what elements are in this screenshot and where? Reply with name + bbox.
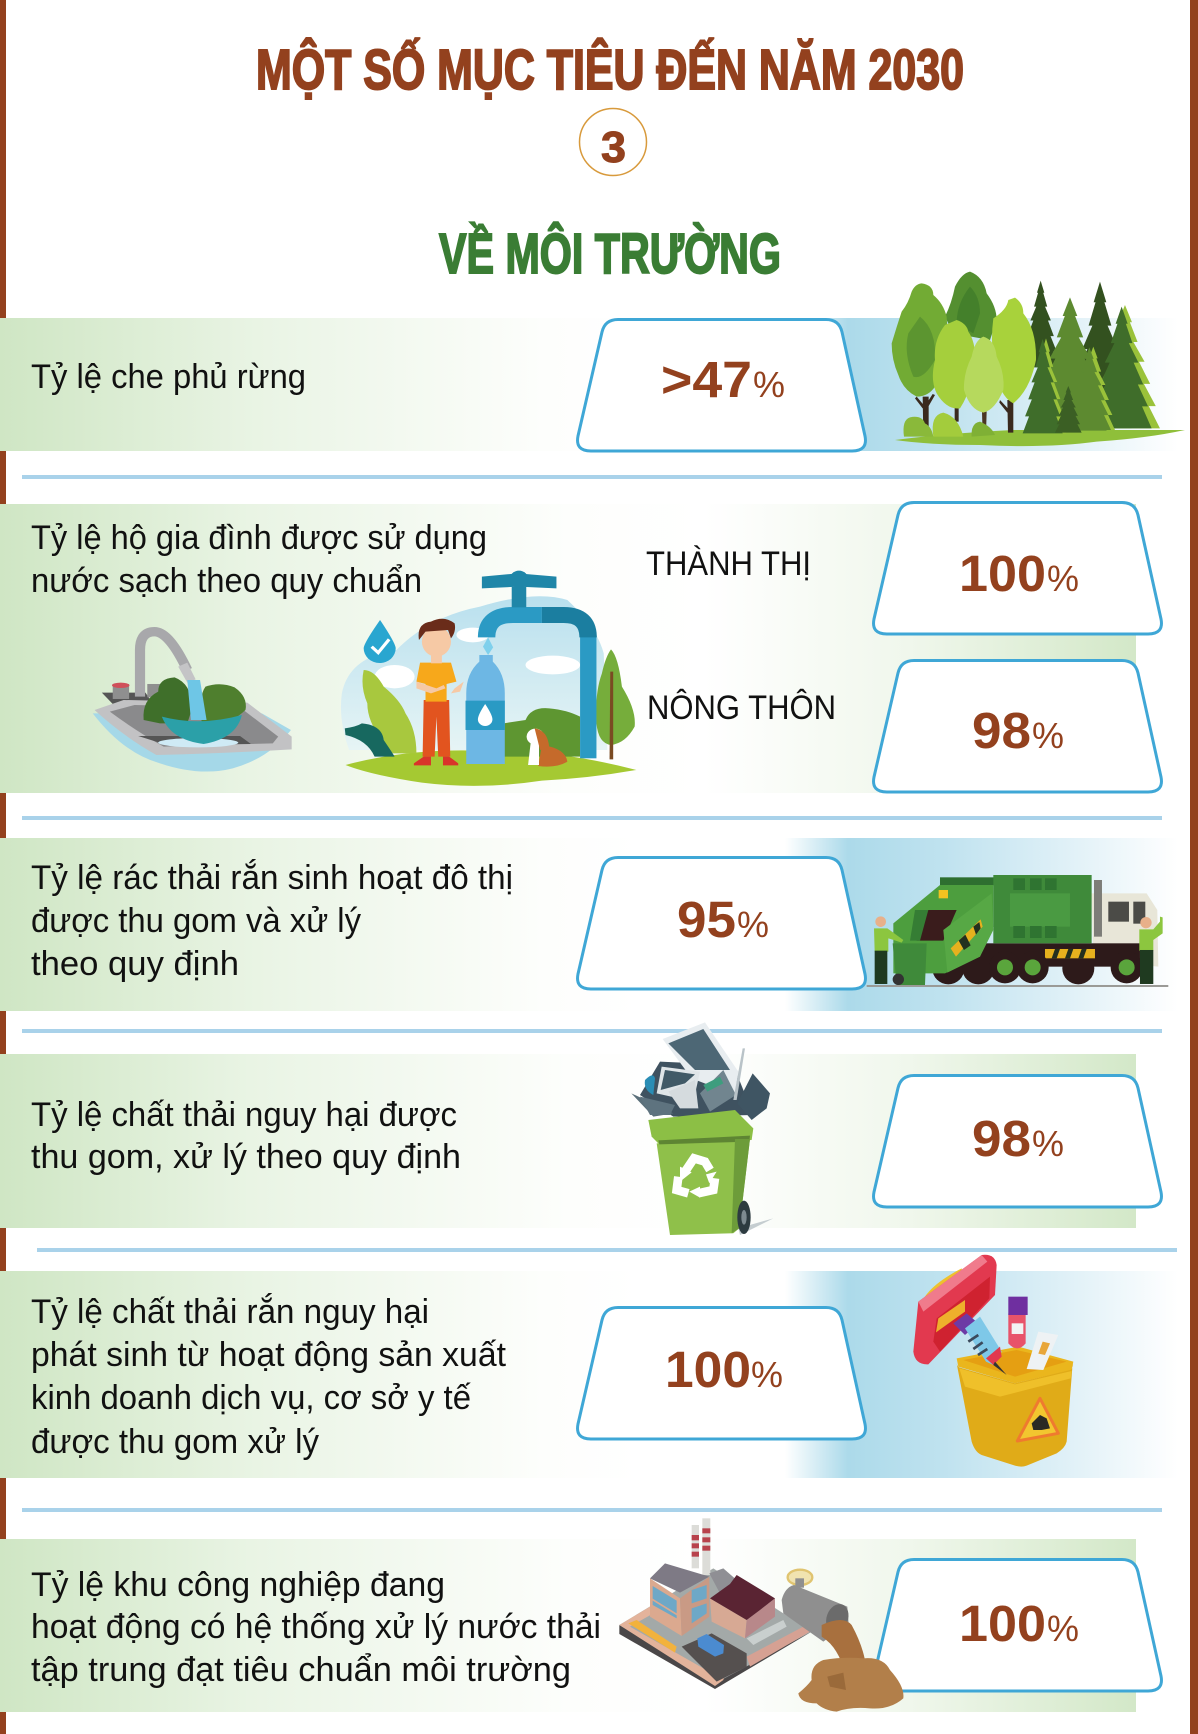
panel: clean water xyxy=(0,502,1161,793)
text: industrial and medical hazardous waste: kinh doanh dịch vụ, cơ sở y tế xyxy=(31,1379,471,1417)
panel: industrial and medical hazardous waste xyxy=(0,1255,1178,1478)
value box: 100 percent: % xyxy=(1047,1608,1079,1649)
value box: rural 98 percent: 98 xyxy=(972,702,1031,759)
value box: urban 100 percent: 100 xyxy=(959,545,1046,602)
icon: garbage truck xyxy=(867,875,1168,987)
value box: 95 percent: 95 xyxy=(677,891,736,948)
text: clean water: Tỷ lệ hộ gia đình được sử dụng xyxy=(31,519,487,557)
text: clean water xyxy=(31,519,487,600)
value box: rural 98 percent: % xyxy=(1032,715,1064,756)
text: clean water: nước sạch theo quy chuẩn xyxy=(31,562,422,600)
value box: 95 percent xyxy=(578,858,865,989)
icon: forest xyxy=(892,272,1185,446)
value box: 98 percent xyxy=(874,1076,1161,1207)
text: industrial wastewater: hoạt động có hệ thống xử lý nước thải xyxy=(31,1608,601,1646)
icon: kitchen sink xyxy=(93,632,292,772)
text: industrial wastewater: tập trung đạt tiêu chuẩn môi trường xyxy=(31,1651,571,1689)
number badge xyxy=(580,108,646,176)
value box: over 47 percent: % xyxy=(753,364,785,405)
value box: over 47 percent: >47 xyxy=(661,351,752,408)
text: forest cover: Tỷ lệ che phủ rừng xyxy=(31,358,306,396)
panel: hazardous waste xyxy=(0,1022,1161,1235)
value box: over 47 percent xyxy=(578,320,865,451)
icon: boy with water tap xyxy=(341,571,636,786)
panel: forest cover xyxy=(0,272,1185,451)
value box: 100 percent: 100 xyxy=(959,1595,1046,1652)
text: industrial and medical hazardous waste: Tỷ lệ chất thải rắn nguy hại xyxy=(31,1293,429,1331)
label: urban: THÀNH THỊ xyxy=(646,545,811,583)
value box: 100 percent: 100 xyxy=(665,1341,751,1398)
text: industrial and medical hazardous waste: được thu gom xử lý xyxy=(31,1423,319,1461)
text: industrial and medical hazardous waste: phát sinh từ hoạt động sản xuất xyxy=(31,1336,507,1374)
text: industrial wastewater xyxy=(31,1566,601,1689)
panel: municipal solid waste xyxy=(0,838,1178,1011)
value box: 95 percent: % xyxy=(737,904,769,945)
value box: urban 100 percent: % xyxy=(1047,558,1079,599)
value box: urban 100 percent xyxy=(874,502,1161,634)
text: hazardous waste: thu gom, xử lý theo quy định xyxy=(31,1138,461,1176)
text: municipal solid waste xyxy=(31,859,513,983)
number badge: 3 xyxy=(601,123,626,172)
label: rural: NÔNG THÔN xyxy=(647,689,836,727)
text: industrial and medical hazardous waste xyxy=(31,1293,507,1461)
panel: industrial wastewater xyxy=(0,1518,1161,1712)
text: hazardous waste xyxy=(31,1096,461,1176)
value box: 100 percent: % xyxy=(751,1354,783,1395)
text: hazardous waste: Tỷ lệ chất thải nguy hại được xyxy=(31,1096,457,1134)
value box: 98 percent: 98 xyxy=(972,1110,1031,1167)
value box: 98 percent: % xyxy=(1032,1123,1064,1164)
value box: 100 percent xyxy=(578,1308,865,1439)
text: industrial wastewater: Tỷ lệ khu công nghiệp đang xyxy=(31,1566,445,1604)
text: municipal solid waste: theo quy định xyxy=(31,945,239,983)
value box: 100 percent xyxy=(874,1560,1161,1691)
icon: recycling bin with e-waste xyxy=(631,1022,773,1235)
icon: factory and waste pipe xyxy=(619,1518,903,1712)
section heading: VỀ MÔI TRƯỜNG xyxy=(439,221,781,286)
text: municipal solid waste: được thu gom và xử lý xyxy=(31,902,361,940)
text: municipal solid waste: Tỷ lệ rác thải rắn sinh hoạt đô thị xyxy=(31,859,513,897)
title: MỘT SỐ MỤC TIÊU ĐẾN NĂM 2030 xyxy=(256,37,964,102)
value box: rural 98 percent xyxy=(874,660,1161,792)
icon: medical waste bin xyxy=(913,1255,1073,1467)
